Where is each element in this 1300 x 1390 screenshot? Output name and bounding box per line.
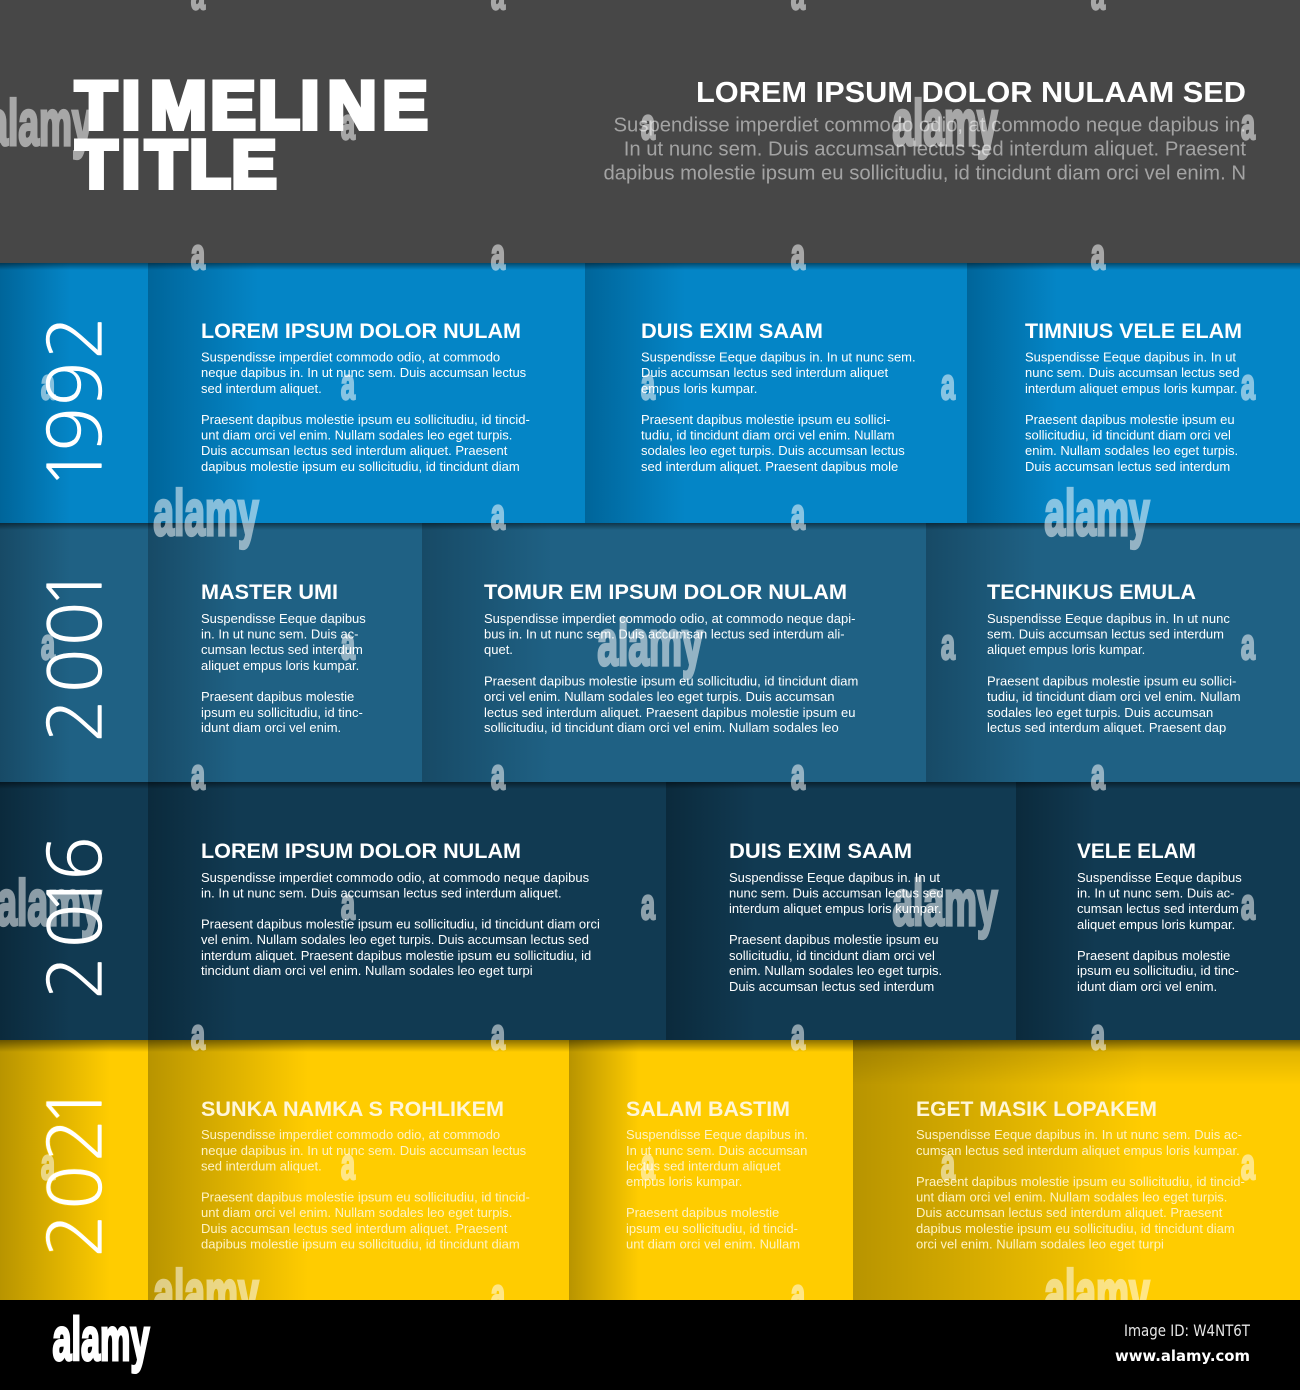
watermark overlay: a xyxy=(191,229,206,279)
entry: tomur em ipsum dolor nulam xyxy=(484,580,858,735)
entry: timnius vele elam: enim. Nullam sodales leo eget turpis. xyxy=(1025,443,1238,458)
entry: lorem ipsum dolor nulam: Duis accumsan lectus sed interdum aliquet. Praesent xyxy=(201,443,508,458)
entry: timnius vele elam: nunc sem. Duis accumsan lectus sed xyxy=(1025,365,1240,380)
watermark overlay: a xyxy=(791,749,806,799)
entry: lorem ipsum dolor nulam xyxy=(201,319,530,474)
image id: Image ID: W4NT6T xyxy=(1124,1321,1250,1340)
header band xyxy=(0,0,1300,263)
entry: master umi: ipsum eu sollicitudiu, id tinc- xyxy=(201,705,363,720)
entry: lorem ipsum dolor nulam xyxy=(201,839,600,978)
entry: master umi: idunt diam orci vel enim. xyxy=(201,720,341,735)
website: www.alamy.com xyxy=(1115,1347,1250,1365)
entry: lorem ipsum dolor nulam: LOREM IPSUM DOLOR NULAM xyxy=(201,319,521,343)
entry: technikus emula: aliquet empus loris kumpar. xyxy=(987,642,1145,657)
year 2021: 2021 xyxy=(38,1083,113,1258)
entry: master umi: in. In ut nunc sem. Duis ac- xyxy=(201,626,359,642)
entry: lorem ipsum dolor nulam: unt diam orci vel enim. Nullam sodales leo eget turpis. xyxy=(201,428,512,442)
entry: sunka namka s rohlikem: dapibus molestie ipsum eu sollicitudiu, id tincidunt diam xyxy=(201,1236,520,1252)
entry: lorem ipsum dolor nulam: Suspendisse imperdiet commodo odio, at commodo neque dapibus xyxy=(201,870,590,885)
watermark overlay: a xyxy=(941,359,956,409)
entry: duis exim saam: sollicitudiu, id tincidunt diam orci vel xyxy=(729,948,935,963)
entry: lorem ipsum dolor nulam: tincidunt diam orci vel enim. Nullam sodales leo eget turpi xyxy=(201,963,533,978)
watermark overlay: a xyxy=(491,489,506,539)
entry: vele elam: Praesent dapibus molestie xyxy=(1077,948,1230,963)
entry: duis exim saam: Suspendisse Eeque dapibus in. In ut nunc sem. xyxy=(641,350,916,364)
main title: TIMELINE xyxy=(75,68,428,144)
watermark overlay: alamy xyxy=(153,1259,259,1330)
entry: salam bastim: lectus sed interdum aliquet xyxy=(626,1158,781,1174)
header description: dapibus molestie ipsum eu sollicitudiu, id tincidunt diam orci vel enim. N xyxy=(603,162,1246,184)
watermark overlay: a xyxy=(1091,229,1106,279)
entry: duis exim saam xyxy=(729,839,944,994)
entry: eget masik lopakem: dapibus molestie ipsum eu sollicitudiu, id tincidunt diam xyxy=(916,1221,1235,1236)
row 2016 background panels xyxy=(0,782,1300,1040)
entry: timnius vele elam: sollicitudiu, id tincidunt diam orci vel xyxy=(1025,428,1231,442)
entry: technikus emula xyxy=(987,580,1241,735)
entry: timnius vele elam: Duis accumsan lectus sed interdum xyxy=(1025,459,1230,474)
entry: duis exim saam: sodales leo eget turpis. Duis accumsan lectus xyxy=(641,443,905,458)
entry: sunka namka s rohlikem: sed interdum aliquet. xyxy=(201,1158,322,1174)
row 2021 background panels xyxy=(0,1040,1300,1300)
entry: sunka namka s rohlikem: Suspendisse imperdiet commodo odio, at commodo xyxy=(201,1127,500,1142)
entry: vele elam: idunt diam orci vel enim. xyxy=(1077,979,1217,994)
entry: vele elam: ipsum eu sollicitudiu, id tinc- xyxy=(1077,963,1239,978)
watermark overlay: a xyxy=(341,619,356,669)
entry: master umi: cumsan lectus sed interdum xyxy=(201,642,363,657)
row 2001 background panels xyxy=(0,523,1300,782)
watermark overlay: a xyxy=(341,359,356,409)
watermark overlay: alamy xyxy=(1044,479,1150,550)
watermark overlay: a xyxy=(641,99,656,149)
entry: eget masik lopakem xyxy=(916,1097,1245,1252)
entry: technikus emula: tudiu, id tincidunt diam orci vel enim. Nullam xyxy=(987,689,1241,704)
watermark overlay: a xyxy=(941,619,956,669)
watermark overlay: a xyxy=(341,99,356,149)
watermark overlay: alamy xyxy=(153,479,259,550)
entry: lorem ipsum dolor nulam: vel enim. Nullam sodales leo eget turpis. Duis accumsan lectus sed xyxy=(201,932,589,947)
entry: eget masik lopakem: unt diam orci vel enim. Nullam sodales leo eget turpis. xyxy=(916,1190,1227,1204)
entry: technikus emula: Praesent dapibus molestie ipsum eu sollici- xyxy=(987,674,1236,688)
entry: technikus emula: sodales leo eget turpis. Duis accumsan xyxy=(987,705,1213,720)
header description: Suspendisse imperdiet commodo odio, at commodo neque dapibus in. xyxy=(614,114,1246,136)
watermark overlay: a xyxy=(491,1269,506,1319)
entry: duis exim saam: nunc sem. Duis accumsan lectus sed xyxy=(729,886,944,900)
watermark overlay: a xyxy=(41,359,56,409)
entry: master umi: Suspendisse Eeque dapibus xyxy=(201,611,366,626)
entry: master umi: MASTER UMI xyxy=(201,580,338,604)
entry: lorem ipsum dolor nulam: interdum aliquet. Praesent dapibus molestie ipsum eu sollicitudiu, id xyxy=(201,948,591,963)
entry: duis exim saam: interdum aliquet empus loris kumpar. xyxy=(729,901,941,916)
entry: lorem ipsum dolor nulam: Praesent dapibus molestie ipsum eu sollicitudiu, id tincidunt diam orci xyxy=(201,916,600,932)
entry: eget masik lopakem: EGET MASIK LOPAKEM xyxy=(916,1097,1157,1121)
entry: vele elam: Suspendisse Eeque dapibus xyxy=(1077,870,1242,885)
entry: eget masik lopakem: cumsan lectus sed interdum aliquet empus loris kumpar. xyxy=(916,1143,1240,1158)
entry: lorem ipsum dolor nulam: Suspendisse imperdiet commodo odio, at commodo xyxy=(201,350,500,364)
entry: vele elam xyxy=(1077,839,1242,994)
watermark overlay: alamy xyxy=(597,609,703,680)
entry: tomur em ipsum dolor nulam: bus in. In ut nunc sem. Duis accumsan lectus sed interdum ali- xyxy=(484,626,845,642)
watermark overlay: a xyxy=(641,879,656,929)
entry: sunka namka s rohlikem: Praesent dapibus molestie ipsum eu sollicitudiu, id tincid- xyxy=(201,1190,530,1204)
entry: duis exim saam: Duis accumsan lectus sed interdum xyxy=(729,979,934,994)
entry: salam bastim: Praesent dapibus molestie xyxy=(626,1205,779,1220)
watermark overlay: a xyxy=(1241,359,1256,409)
watermark overlay: a xyxy=(641,359,656,409)
entry: tomur em ipsum dolor nulam: Praesent dapibus molestie ipsum eu sollicitudiu, id tincidunt diam xyxy=(484,674,858,688)
entry: lorem ipsum dolor nulam: neque dapibus in. In ut nunc sem. Duis accumsan lectus xyxy=(201,365,527,380)
main title: TITLE xyxy=(76,126,277,202)
watermark overlay: a xyxy=(341,1139,356,1189)
entry: duis exim saam: DUIS EXIM SAAM xyxy=(729,839,912,863)
entry: eget masik lopakem: orci vel enim. Nullam sodales leo eget turpi xyxy=(916,1236,1164,1252)
entry: timnius vele elam: interdum aliquet empus loris kumpar. xyxy=(1025,381,1237,396)
row 1992 xyxy=(0,263,1300,523)
footer logo: alamy xyxy=(53,1307,149,1374)
entry: eget masik lopakem: Duis accumsan lectus sed interdum aliquet. Praesent xyxy=(916,1205,1223,1220)
entry: duis exim saam: Praesent dapibus molestie ipsum eu xyxy=(729,932,939,947)
watermark overlay: a xyxy=(191,1009,206,1059)
entry: salam bastim xyxy=(626,1097,808,1252)
watermark overlay: a xyxy=(1091,1009,1106,1059)
entry: lorem ipsum dolor nulam: Praesent dapibus molestie ipsum eu sollicitudiu, id tincid- xyxy=(201,412,530,427)
entry: duis exim saam: empus loris kumpar. xyxy=(641,381,757,396)
watermark overlay: a xyxy=(1241,99,1256,149)
entry: sunka namka s rohlikem: unt diam orci vel enim. Nullam sodales leo eget turpis. xyxy=(201,1205,512,1220)
watermark overlay: a xyxy=(641,1139,656,1189)
entry: tomur em ipsum dolor nulam: orci vel enim. Nullam sodales leo eget turpis. Duis accumsan xyxy=(484,689,834,704)
entry: vele elam: in. In ut nunc sem. Duis ac- xyxy=(1077,886,1235,900)
watermark overlay: alamy xyxy=(892,89,998,160)
row 2021 xyxy=(0,1040,1300,1300)
entry: sunka namka s rohlikem xyxy=(201,1097,530,1252)
entry: technikus emula: sem. Duis accumsan lectus sed interdum xyxy=(987,626,1224,642)
watermark overlay: a xyxy=(791,489,806,539)
row 2016 xyxy=(0,782,1300,1040)
entry: master umi xyxy=(201,580,366,735)
entry: lorem ipsum dolor nulam: in. In ut nunc sem. Duis accumsan lectus sed interdum aliquet. xyxy=(201,886,562,900)
main title xyxy=(75,68,428,202)
watermark overlay: a xyxy=(491,229,506,279)
entry: salam bastim: empus loris kumpar. xyxy=(626,1174,742,1189)
entry: vele elam: VELE ELAM xyxy=(1077,839,1196,863)
entry: tomur em ipsum dolor nulam: sollicitudiu, id tincidunt diam orci vel enim. Nullam sodales leo xyxy=(484,720,839,735)
entry: tomur em ipsum dolor nulam: Suspendisse imperdiet commodo odio, at commodo neque dapi- xyxy=(484,611,855,626)
entry: lorem ipsum dolor nulam: dapibus molestie ipsum eu sollicitudiu, id tincidunt diam xyxy=(201,459,520,474)
watermark overlay: a xyxy=(1241,1139,1256,1189)
entry: tomur em ipsum dolor nulam: lectus sed interdum aliquet. Praesent dapibus molestie ipsum eu xyxy=(484,705,855,720)
watermark overlay: a xyxy=(41,619,56,669)
entry: timnius vele elam: TIMNIUS VELE ELAM xyxy=(1025,319,1242,343)
entry: duis exim saam: Duis accumsan lectus sed interdum aliquet xyxy=(641,365,889,380)
entry: duis exim saam xyxy=(641,319,916,474)
entry: lorem ipsum dolor nulam: sed interdum aliquet. xyxy=(201,381,322,396)
entry: salam bastim: SALAM BASTIM xyxy=(626,1097,790,1121)
entry: vele elam: cumsan lectus sed interdum xyxy=(1077,901,1239,916)
entry: sunka namka s rohlikem: SUNKA NAMKA S ROHLIKEM xyxy=(201,1097,504,1121)
entry: timnius vele elam: Suspendisse Eeque dapibus in. In ut xyxy=(1025,350,1236,364)
row 2001 xyxy=(0,523,1300,782)
header description: In ut nunc sem. Duis accumsan lectus sed interdum aliquet. Praesent xyxy=(624,138,1246,160)
entry: salam bastim: In ut nunc sem. Duis accumsan xyxy=(626,1143,807,1158)
watermark overlay: a xyxy=(791,229,806,279)
entry: tomur em ipsum dolor nulam: quet. xyxy=(484,642,513,657)
entry: timnius vele elam xyxy=(1025,319,1242,474)
entry: duis exim saam: DUIS EXIM SAAM xyxy=(641,319,823,343)
watermark overlay: a xyxy=(1241,619,1256,669)
entry: timnius vele elam: Praesent dapibus molestie ipsum eu xyxy=(1025,412,1235,427)
entry: master umi: Praesent dapibus molestie xyxy=(201,689,354,704)
entry: technikus emula: Suspendisse Eeque dapibus in. In ut nunc xyxy=(987,611,1230,626)
footer bar xyxy=(0,1300,1300,1390)
watermark overlay: a xyxy=(191,749,206,799)
year 2001: 2001 xyxy=(38,565,113,743)
entry: eget masik lopakem: Praesent dapibus molestie ipsum eu sollicitudiu, id tincid- xyxy=(916,1174,1245,1189)
entry: technikus emula: lectus sed interdum aliquet. Praesent dap xyxy=(987,720,1226,735)
year 1992: 1992 xyxy=(38,315,113,491)
entry: technikus emula: TECHNIKUS EMULA xyxy=(987,580,1196,604)
header subtitle: LOREM IPSUM DOLOR NULAAM SED xyxy=(696,77,1246,109)
watermark overlay: a xyxy=(791,1009,806,1059)
entry: tomur em ipsum dolor nulam: TOMUR EM IPSUM DOLOR NULAM xyxy=(484,580,847,604)
entry: salam bastim: Suspendisse Eeque dapibus in. xyxy=(626,1127,808,1142)
year 2016: 2016 xyxy=(38,836,113,1000)
entry: lorem ipsum dolor nulam: LOREM IPSUM DOLOR NULAM xyxy=(201,839,521,863)
entry: vele elam: aliquet empus loris kumpar. xyxy=(1077,917,1235,932)
row 1992 background panels xyxy=(0,263,1300,523)
entry: duis exim saam: Suspendisse Eeque dapibus in. In ut xyxy=(729,870,940,885)
watermark overlay: a xyxy=(491,749,506,799)
entry: duis exim saam: tudiu, id tincidunt diam orci vel enim. Nullam xyxy=(641,428,895,442)
watermark overlay: a xyxy=(791,1269,806,1319)
entry: sunka namka s rohlikem: neque dapibus in. In ut nunc sem. Duis accumsan lectus xyxy=(201,1143,527,1158)
entry: sunka namka s rohlikem: Duis accumsan lectus sed interdum aliquet. Praesent xyxy=(201,1221,508,1236)
header description xyxy=(603,114,1246,184)
watermark overlay: a xyxy=(491,1009,506,1059)
watermark overlay: a xyxy=(941,1139,956,1189)
watermark overlay: alamy xyxy=(1044,1259,1150,1330)
entry: duis exim saam: Praesent dapibus molestie ipsum eu sollici- xyxy=(641,412,890,427)
entry: salam bastim: ipsum eu sollicitudiu, id tincid- xyxy=(626,1221,798,1236)
entry: salam bastim: unt diam orci vel enim. Nullam xyxy=(626,1236,800,1252)
watermark overlay: alamy xyxy=(892,869,998,940)
entry: duis exim saam: enim. Nullam sodales leo eget turpis. xyxy=(729,963,942,978)
entry: eget masik lopakem: Suspendisse Eeque dapibus in. In ut nunc sem. Duis ac- xyxy=(916,1127,1242,1142)
watermark overlay: a xyxy=(41,1139,56,1189)
entry: duis exim saam: sed interdum aliquet. Praesent dapibus mole xyxy=(641,459,898,474)
entry: master umi: aliquet empus loris kumpar. xyxy=(201,658,359,673)
watermark overlay: a xyxy=(1241,879,1256,929)
watermark overlay: a xyxy=(341,879,356,929)
watermark overlay: a xyxy=(1091,749,1106,799)
